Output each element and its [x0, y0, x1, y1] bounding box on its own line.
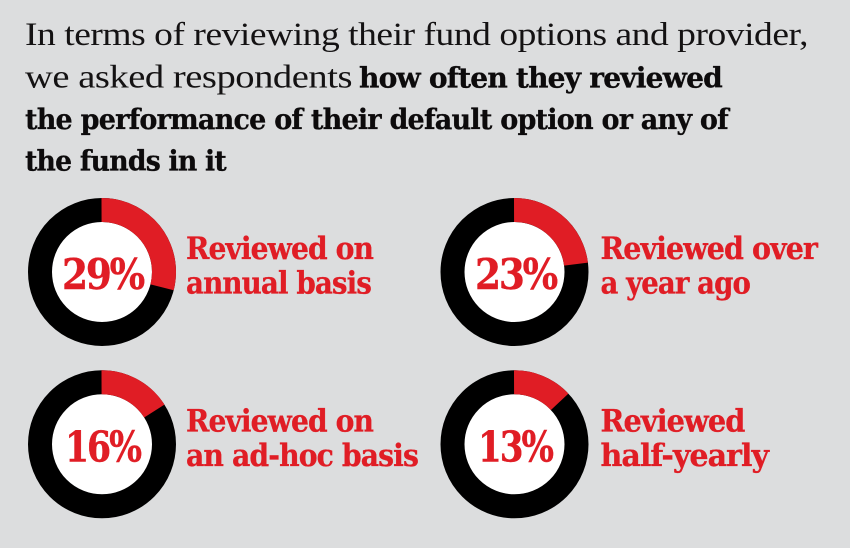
donut: 23%	[452, 210, 576, 334]
label: half-yearly: half-yearly	[600, 438, 770, 474]
title: we asked respondents	[25, 60, 352, 96]
label: over a year ago: Reviewed over	[600, 231, 819, 267]
title: In terms of reviewing their fund options and provider,	[25, 17, 808, 53]
donut: 29%	[40, 210, 164, 334]
label: ad-hoc: Reviewed on	[186, 404, 374, 440]
title	[25, 17, 808, 178]
label: half-yearly: Reviewed	[600, 404, 745, 440]
label: over a year ago: a year ago	[600, 266, 751, 302]
label: annual: Reviewed on	[186, 231, 374, 267]
label: ad-hoc: an ad-hoc basis	[186, 438, 418, 474]
label: half-yearly	[600, 404, 770, 474]
donut: 16%	[40, 382, 164, 506]
donut: 29%: 29%	[62, 250, 145, 300]
label: over a year ago	[600, 231, 819, 302]
donut: 23%: 23%	[475, 250, 558, 300]
donut: 13%	[452, 382, 576, 506]
title: the performance of their default option or any of	[25, 103, 731, 136]
title: how often they reviewed	[359, 62, 722, 94]
donut: 13%: 13%	[478, 422, 554, 472]
label: ad-hoc	[186, 404, 418, 474]
label: annual: annual basis	[186, 266, 371, 302]
label: annual	[186, 231, 374, 302]
donut: 16%: 16%	[65, 422, 142, 472]
title: the funds in it	[25, 144, 227, 178]
